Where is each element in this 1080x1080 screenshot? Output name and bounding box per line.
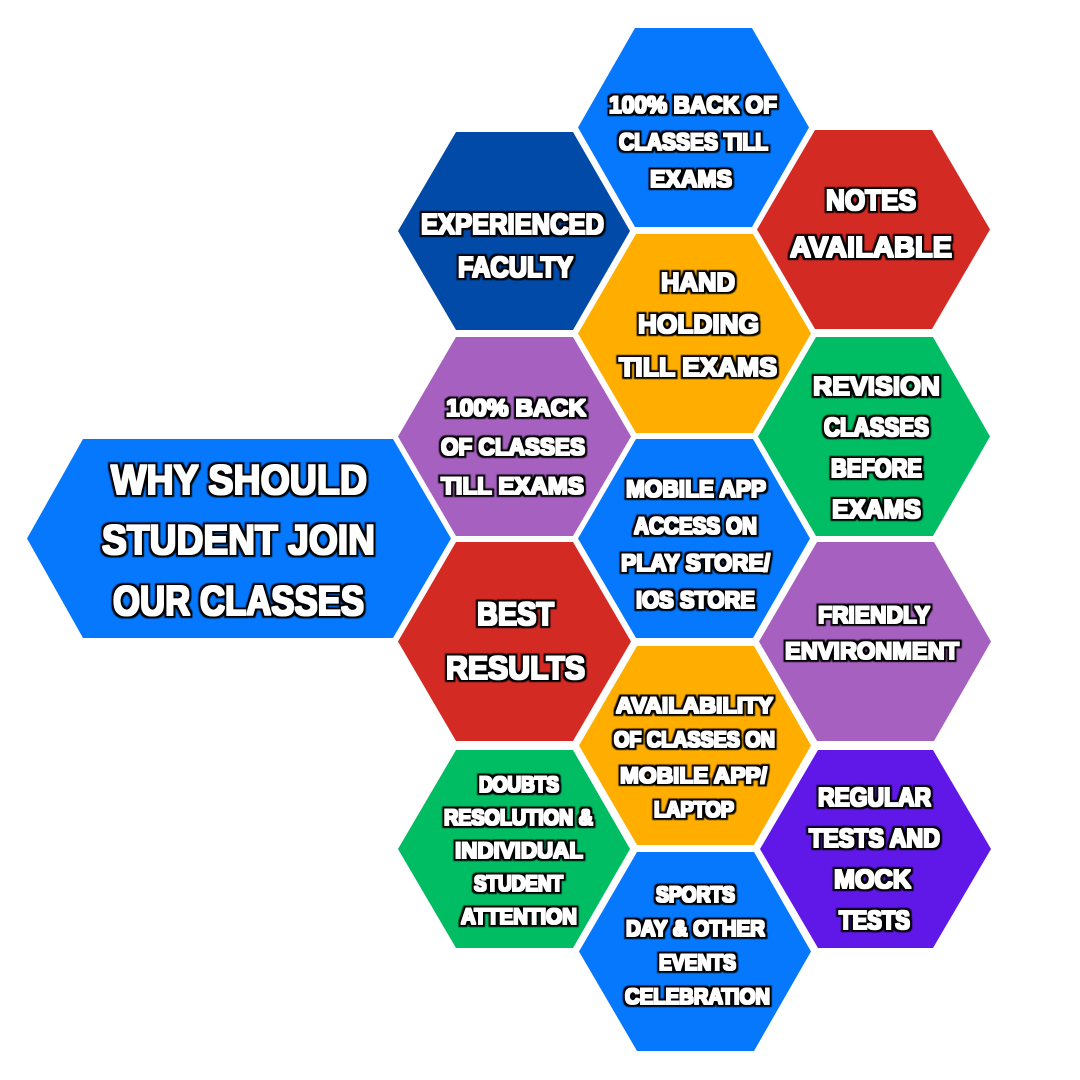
label: FACULTY	[458, 252, 573, 284]
label	[619, 267, 777, 382]
label: IOS STORE	[636, 587, 755, 614]
panel: availability of classes	[579, 646, 811, 845]
heading	[102, 456, 375, 624]
label: PLAY STORE/	[621, 550, 770, 577]
label: FRIENDLY	[818, 602, 930, 629]
label: DOUBTS	[479, 772, 559, 797]
label: TESTS	[839, 905, 910, 935]
panel: doubts resolution	[398, 750, 630, 948]
label: NOTES	[826, 185, 916, 217]
label: OF CLASSES	[441, 434, 585, 461]
label: BEST	[477, 596, 554, 632]
heading: WHY SHOULD	[111, 456, 367, 503]
panel: 100% back of classes till exams (purple)	[398, 337, 631, 536]
panel: 100% back of classes till exams (blue)	[578, 28, 809, 227]
label	[813, 371, 940, 524]
panel: friendly environment	[759, 542, 991, 741]
panel: mobile app access	[578, 439, 810, 638]
label: MOBILE APP/	[620, 763, 767, 788]
label	[614, 693, 775, 822]
label	[790, 185, 952, 264]
label: 100% BACK OF	[609, 92, 777, 119]
label: EXAMS	[650, 166, 732, 193]
label	[421, 209, 604, 284]
label: TILL EXAMS	[441, 473, 584, 500]
label: BEFORE	[831, 453, 922, 483]
panel: best results	[398, 542, 631, 741]
label: AVAILABLE	[790, 232, 952, 264]
label: TILL EXAMS	[619, 352, 777, 382]
panel: regular tests and mock tests	[760, 750, 991, 948]
panel: experienced faculty	[398, 132, 630, 330]
label: INDIVIDUAL	[455, 838, 583, 863]
panel: revision classes before exams	[758, 337, 990, 536]
label	[809, 782, 940, 935]
label: EVENTS	[659, 950, 736, 975]
label	[625, 882, 770, 1009]
label: MOBILE APP	[626, 476, 766, 503]
label: OF CLASSES ON	[614, 727, 775, 752]
label: 100% BACK	[446, 395, 587, 422]
label	[785, 602, 959, 665]
label	[444, 772, 593, 929]
heading: OUR CLASSES	[113, 577, 364, 624]
label: HAND	[661, 267, 735, 297]
label: ACCESS ON	[634, 513, 757, 540]
panel: sports day and other events	[579, 852, 811, 1051]
label: RESOLUTION &	[444, 805, 593, 830]
label: TESTS AND	[809, 823, 940, 853]
label: STUDENT	[474, 871, 563, 896]
heading: STUDENT JOIN	[102, 516, 375, 563]
label: ENVIRONMENT	[785, 638, 959, 665]
label	[609, 92, 777, 193]
label	[621, 476, 770, 614]
panel: why should student join our classes	[27, 439, 451, 638]
label: CELEBRATION	[625, 984, 770, 1009]
label: ATTENTION	[461, 904, 577, 929]
panel: notes available	[757, 130, 990, 329]
panel: hand holding till exams	[578, 234, 811, 433]
label: MOCK	[834, 864, 911, 894]
label: CLASSES	[824, 412, 929, 442]
label: HOLDING	[638, 309, 759, 339]
label: REGULAR	[818, 782, 931, 812]
label: EXPERIENCED	[421, 209, 604, 241]
label: EXAMS	[832, 494, 921, 524]
label: DAY & OTHER	[626, 916, 765, 941]
label: RESULTS	[446, 650, 585, 686]
label: AVAILABILITY	[616, 693, 773, 718]
label: CLASSES TILL	[619, 129, 768, 156]
label: LAPTOP	[654, 797, 734, 822]
label	[446, 596, 585, 686]
label: SPORTS	[656, 882, 735, 907]
label: REVISION	[813, 371, 940, 401]
label	[441, 395, 587, 500]
